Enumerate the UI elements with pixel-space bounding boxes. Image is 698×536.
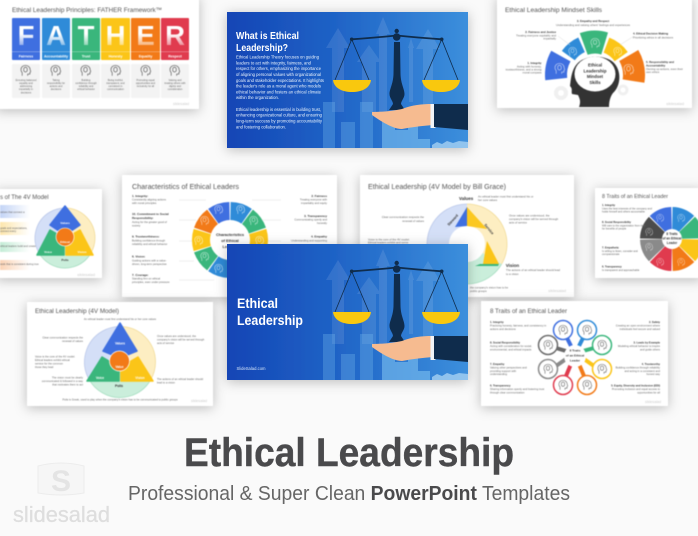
annotation text: public groups [470, 289, 487, 293]
ring label [216, 232, 244, 249]
fan icons [555, 38, 634, 75]
annotations: Ethical leaders exhibit ethical [35, 358, 70, 362]
principle cards [12, 64, 189, 98]
card text: consideration [168, 88, 183, 91]
body text: enhancing organizational culture, and ensuring [236, 113, 323, 118]
left labels: 9. Trustworthiness: [132, 235, 160, 239]
Polis label small: Polis [61, 258, 69, 262]
left labels: society [132, 223, 141, 227]
watermark: slidesalad [77, 272, 95, 277]
card text: communication [107, 88, 125, 91]
strip text: values that connect a [0, 210, 25, 214]
cover heading: Ethical [237, 296, 278, 311]
left labels: Standing firm on ethical [132, 277, 160, 281]
right labels: 2. Fairness [311, 194, 327, 198]
wheel trait labels: for benefits of people [602, 226, 627, 230]
watermark: slidesalad [548, 288, 566, 293]
letter tiles: Accountability [44, 54, 68, 58]
left labels: 1. Integrity: [132, 194, 148, 198]
slide: Characteristics of Ethical Leaders [122, 175, 337, 297]
slide: 4V model cropped left [0, 189, 106, 279]
card text: equality and [19, 82, 33, 85]
left trait labels: Practicing honesty, fairness, and consistency in [490, 324, 547, 328]
slide: Mindset Skills [497, 0, 692, 128]
annotations: The vision must be clearly [52, 376, 84, 380]
left trait labels: 8. Social Responsibility [490, 340, 521, 344]
annotations: lead to a vision [157, 380, 175, 384]
right labels [291, 194, 328, 242]
letter tiles: H [106, 20, 125, 51]
dark wedges [455, 207, 467, 227]
annotations: Voice is the core of the 4V model. [35, 354, 75, 358]
hub label: Leader [570, 358, 581, 362]
head label: Ethical [588, 62, 602, 68]
wheel label: of an Ethical [663, 236, 682, 240]
subtitle: Professional & Super Clean PowerPoint Templates [128, 483, 570, 505]
right labels: 3. Transparency [304, 214, 327, 218]
strip text: work that is consistent during true [0, 262, 39, 266]
wheel label: 8 Traits [666, 232, 678, 236]
right labels: Understanding and supporting [291, 238, 327, 242]
trait rings [538, 320, 612, 394]
skill labels: moral compass [523, 70, 542, 74]
triangle large [87, 323, 153, 381]
card text: addressing [20, 85, 33, 88]
card text: Taking [52, 79, 60, 82]
right trait labels: Building confidence through reliability [616, 366, 661, 370]
slide title: 8 traits: 8 Traits of an Ethical Leader [490, 308, 567, 315]
wheel trait labels: 1. Integrity [602, 203, 616, 207]
left labels: Consistently aligning actions [132, 198, 167, 202]
card text: opportunities and [136, 82, 156, 85]
skill labels: Treating everyone equitably and [516, 34, 556, 38]
card text: Building [82, 79, 91, 82]
annotation text: renewal of values [402, 219, 425, 223]
body text: leaders to act with integrity, fairness, and [236, 60, 312, 65]
left labels: principles, even under pressure [132, 280, 170, 284]
annotation text: Voice is the core of the 4V model. [368, 238, 410, 242]
letter tiles: A [46, 20, 66, 51]
letter tiles: T [78, 20, 95, 51]
slide: What is Ethical Leadership [227, 12, 468, 148]
skill labels: 1. Integrity [527, 61, 542, 65]
annotation text: the company's vision has to be [470, 286, 509, 290]
drop tails [556, 338, 594, 376]
wheel icons [646, 214, 685, 266]
skill labels: Accountability [646, 64, 666, 68]
body text: ethical behavior and fosters an ethical climate [236, 89, 322, 94]
skill labels: 5. Responsibility and [646, 60, 674, 64]
hub label: of an Ethical [566, 354, 584, 358]
left trait labels: through clear communication [490, 390, 525, 394]
skill labels: 2. Fairness and Justice [525, 30, 556, 34]
slide title: 4V model: Ethical Leadership (4V Model) [35, 308, 119, 315]
wheel trait labels: compassionate [602, 252, 620, 256]
left trait labels: environmental, and ethical impacts [490, 347, 532, 351]
illustration: scale on hand [323, 17, 468, 148]
skill labels [506, 19, 683, 74]
left trait labels: Acting with consideration for social, [490, 344, 532, 348]
right trait labels [611, 320, 661, 394]
wheel trait labels: 6. Transparency [602, 264, 622, 268]
annotations: those they lead [35, 365, 54, 369]
donut [412, 189, 522, 299]
left trait labels: 6. Transparency [490, 384, 511, 388]
center circle [56, 228, 74, 246]
card text: confidence through [75, 82, 97, 85]
annotations: service for the common [35, 362, 63, 366]
Polis label: Polis [115, 384, 123, 388]
annotation text [368, 194, 560, 293]
faded strips [0, 205, 30, 270]
left labels [132, 194, 170, 284]
left labels: 6. Vision: [132, 255, 145, 259]
letter tiles: E [136, 20, 155, 51]
annotation text: her core values [478, 198, 498, 202]
card text: consistent in [109, 85, 123, 88]
left trait labels: Sharing information openly and fostering trust [490, 387, 544, 391]
skill labels: Owning up actions, even their [646, 67, 683, 71]
triangle labels: Voice [44, 250, 52, 254]
skill labels: 3. Empathy and Respect [577, 19, 609, 23]
logo: slidesalad [13, 463, 110, 527]
watermark: slidesalad [666, 101, 684, 106]
annotations: Clear communication respects the [42, 336, 83, 340]
wheel trait labels: Is transparent and approachable [602, 268, 640, 272]
wheel label [663, 232, 682, 245]
right trait labels: opportunities for all [637, 390, 660, 394]
fan segments [542, 22, 648, 128]
skill labels: trustworthiness, and a strong [506, 68, 542, 72]
left labels: 10. Commitment to Social [132, 212, 169, 216]
heading: What is Ethical Leadership: Leadership? [236, 43, 288, 54]
right trait labels: Modeling ethical behavior to inspire [618, 344, 660, 348]
hub label: 8 Traits [570, 348, 581, 352]
donut labels: Service [483, 223, 495, 235]
right trait labels: and acting in a consistent and [624, 369, 661, 373]
right trait labels: Creating an open environment where [616, 324, 660, 328]
body text [236, 54, 324, 129]
skill labels: 4. Ethical Decision Making [633, 32, 668, 36]
triangle labels large: Vision [135, 376, 145, 380]
head label [584, 62, 607, 85]
head label: Leadership [584, 68, 607, 73]
annotations [35, 317, 205, 402]
annotation text: Ethical leaders exhibit and serve [368, 240, 409, 244]
letter tiles: Trust [82, 54, 91, 58]
skill labels: impartially [543, 36, 557, 40]
annotations: renewal of values [62, 339, 84, 343]
left labels: 7. Courage: [132, 273, 149, 277]
slide title: Bill Grace: Ethical Leadership (4V Model by Bill Grace) [368, 184, 506, 191]
body text: and fostering collaboration. [236, 124, 286, 129]
annotations: An ethical leader must first understand his or her core values [84, 317, 157, 321]
triangle labels large: Values [115, 342, 125, 346]
right trait labels: 5. Equity, Diversity and Inclusion (EDI) [611, 384, 660, 388]
right trait labels: honest way [646, 372, 661, 376]
skill labels: Understanding and valuing others' feelings and experiences [556, 23, 631, 27]
card text: Valuing and [168, 79, 182, 82]
body text: of aligning personal values with organizational [236, 72, 321, 77]
slide: 8 Traits wheel cropped right [595, 188, 698, 278]
right labels: Communicating openly and [294, 218, 327, 222]
skill labels: Prioritizing ethics in all decisions [633, 36, 674, 40]
body text: Ethical leadership is essential in building trust, [236, 107, 321, 112]
slide title: 4V cropped: s of The 4V Model [0, 195, 49, 201]
left labels: Responsibility: [132, 216, 154, 220]
letter tiles [12, 18, 189, 60]
annotations: The actions of an ethical leader should [157, 377, 204, 381]
body text: long-term success by promoting accountability [236, 118, 323, 124]
wheel trait labels: 8. Social Responsibility [602, 220, 632, 224]
annotations: Polis is Greek, used to play when the company's vision has to be communicated to public groups [62, 398, 178, 402]
skill labels: own ethics [646, 70, 660, 74]
wheel label: Leader [667, 241, 678, 245]
heading: What is Ethical Leadership [236, 31, 299, 54]
slide title: 8 traits wheel: 8 Traits of an Ethical Leader [602, 194, 668, 200]
card text: Promoting equal [136, 79, 155, 82]
body text: within the organization. [236, 95, 279, 100]
logo: slidesalad: S [51, 465, 71, 498]
annotation text: An ethical leader must first understand his or [478, 194, 533, 198]
card text: treating others with [164, 82, 186, 85]
right labels: impartiality and equity [301, 201, 328, 205]
card text: Being truthful, [108, 79, 124, 82]
triangle labels large: Voice [96, 376, 104, 380]
card text: actions and [50, 85, 63, 88]
left labels: Guiding actions with a value- [132, 258, 166, 262]
ring icons [195, 205, 264, 273]
skill labels: Acting with honesty, [517, 64, 542, 68]
body text: the leader's role as a moral agent who models [236, 84, 321, 88]
right trait labels: Promoting inclusion and equal access to [612, 387, 661, 391]
left trait labels: providing support with [490, 369, 517, 373]
annotation text: company's vision will be served through [509, 217, 559, 221]
letter tiles: Fairness [19, 54, 33, 58]
triangle labels: Values [60, 221, 70, 225]
pie lobes large [72, 314, 168, 410]
ring icons [544, 325, 607, 390]
logo: slidesalad: slidesalad [13, 502, 110, 527]
center circle large [110, 351, 130, 371]
illustration: scale on hand cover [323, 249, 468, 380]
annotation text: to a vision [506, 272, 519, 276]
annotation text: acts of service [509, 220, 527, 224]
head label: Skills [589, 80, 601, 85]
annotations: acts of service [157, 341, 175, 345]
watermark: slidesalad [173, 102, 189, 106]
annotation text: Clear communication respects the [382, 215, 424, 219]
strip text: connect every [0, 229, 17, 233]
strip text [0, 210, 39, 266]
right trait labels: 4. Trustworthy [642, 362, 660, 366]
body text: respect for others, emphasizing the importance [236, 66, 322, 71]
letter tiles: Respect [168, 54, 183, 58]
gears [556, 86, 627, 98]
left labels: driven, long-term perspective [132, 262, 167, 266]
left trait labels: understanding [490, 372, 508, 376]
card text [16, 79, 186, 94]
triangle [37, 206, 93, 255]
annotations: communicated & followed in a way [42, 379, 84, 383]
left trait labels: Valuing other perspectives and [490, 366, 527, 370]
letter tiles: Honesty [109, 54, 122, 58]
triangle labels: Vision [78, 250, 87, 254]
cover heading: Leadership [237, 313, 303, 328]
right trait labels: and guide others [640, 347, 661, 351]
left labels: Acting for the greater good of [132, 220, 167, 224]
watermark: slidesalad [645, 400, 661, 404]
donut labels: Steward [447, 214, 459, 227]
left trait labels: 7. Empathy [490, 362, 505, 366]
pie lobes [24, 197, 106, 279]
Vision heading: Vision [506, 263, 519, 268]
wheel trait labels: Is willing to listen, consider and [602, 249, 638, 253]
left labels: reliability and ethical behavior [132, 242, 167, 246]
card text: ethical behavior [77, 88, 95, 91]
card text: responsibility for [47, 82, 65, 85]
strip text: goals and expectations, [0, 226, 28, 230]
card text: decisions [21, 92, 32, 94]
annotation text: Once values are understood, the [509, 214, 550, 218]
slide: 4V Model by Bill Grace [360, 175, 574, 299]
ring label: of Ethical [221, 238, 239, 243]
slide title: Mindset: Ethical Leadership Mindset Skills [505, 7, 602, 14]
card text: transparent, and [106, 82, 125, 85]
body text: goals and stakeholder expectations. It highlights [236, 78, 324, 83]
letter tiles: F [18, 20, 34, 51]
triangle labels [44, 221, 87, 254]
wheel trait labels [602, 203, 652, 272]
right trait labels: 2. Safety [649, 320, 660, 324]
left labels: Building confidence through [132, 238, 166, 242]
wheel trait labels: holds himself and others accountable [602, 210, 645, 214]
wheel trait labels: 7. Empathetic [602, 246, 619, 250]
left labels: with moral principles [132, 201, 157, 205]
ring segments [189, 199, 271, 281]
heading: What is Ethical Leadership: What is Ethical [236, 31, 299, 42]
right labels: honestly [317, 221, 328, 225]
donut labels [447, 214, 495, 235]
left trait labels: 1. Integrity [490, 320, 504, 324]
slide: 8 Traits of an Ethical Leader [481, 301, 668, 406]
cover url: SlideSalad.com [236, 366, 266, 371]
right trait labels: 3. Leads by Example [634, 340, 660, 344]
triangle labels large [96, 342, 145, 380]
head silhouette [570, 57, 619, 107]
letter tiles: R [165, 20, 185, 51]
card icons [21, 65, 180, 76]
triangle labels large: Value [115, 365, 124, 369]
wheel trait labels: Will care to the organization from time [602, 224, 646, 228]
watermark: slidesalad [191, 399, 207, 403]
card text: Ensuring balanced [16, 79, 37, 82]
wheel trait labels: Uses the best interests of the company and [602, 206, 652, 210]
body text: Ethical Leadership Theory focuses on guiding [236, 54, 320, 60]
card text: inclusivity for all [137, 85, 155, 88]
right labels: Treating everyone with [300, 198, 327, 202]
card text: dignity and [169, 85, 182, 88]
connectors [179, 200, 281, 280]
slide: FATHER framework [0, 0, 199, 109]
ring label: Leaders [223, 244, 237, 249]
triangle labels: Ethical [60, 240, 70, 244]
ring label: Characteristics [216, 232, 244, 237]
wheel segments [642, 209, 698, 269]
Values heading: Values [459, 196, 474, 201]
annotation text: The actions of an ethical leader should lead [506, 268, 560, 272]
slide title: FATHER: Ethical Leadership Principles: FATHER Framework™ [12, 7, 162, 14]
head label: Mindset [587, 74, 604, 79]
slide title: Characteristics: Characteristics of Ethical Leaders [132, 184, 240, 191]
left trait labels: actions and decisions [490, 327, 516, 331]
card text: impartially in [19, 88, 34, 91]
center hub [564, 345, 586, 367]
main title: Ethical Leadership [184, 431, 514, 475]
card text: decisions [51, 88, 62, 91]
letter tiles: Equality [139, 54, 152, 58]
cover heading [237, 296, 303, 328]
right labels: 4. Empathy [311, 235, 327, 239]
left trait labels [490, 320, 547, 394]
annotations: that motivates them to act [52, 382, 83, 386]
right trait labels: individuals feel secure and valued [620, 327, 661, 331]
hub label [566, 348, 584, 362]
annotations: Once values are understood, the [157, 334, 196, 338]
slide: cover Ethical Leadership [227, 244, 468, 380]
annotations: company's vision will be served through [157, 338, 205, 342]
card text: reliability and [79, 85, 94, 88]
strip text: ethical leaders build and create [0, 244, 36, 248]
slide: Ethical Leadership 4V Model [27, 302, 213, 410]
